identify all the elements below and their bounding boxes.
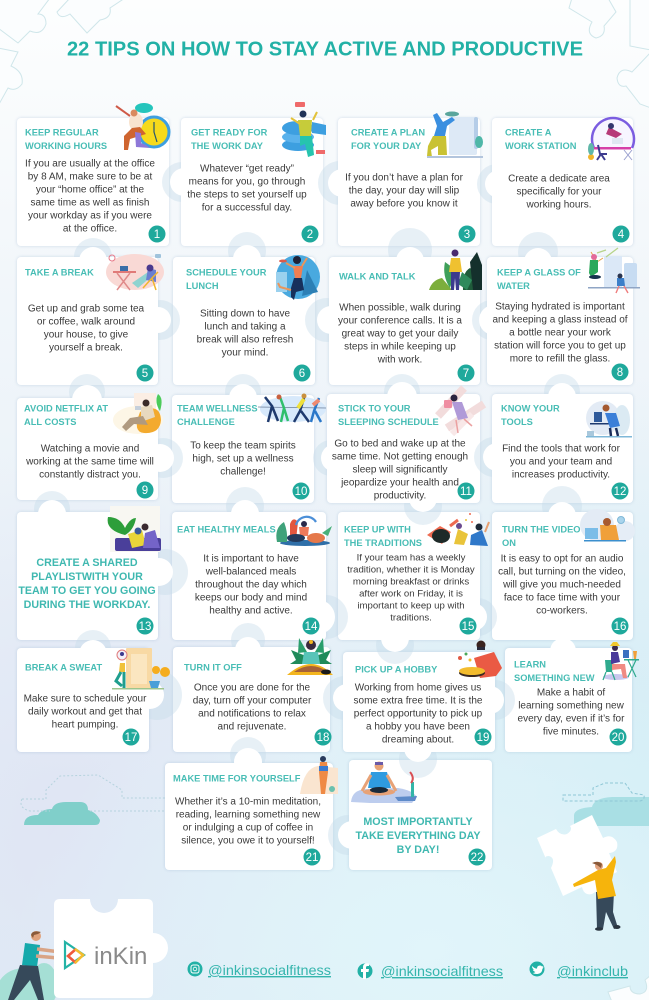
body 19: a hobby you have been [366, 722, 470, 732]
body 4: working hours. [525, 200, 592, 210]
body 15: If your team has a weekly [357, 552, 466, 564]
body 2: the steps to set yourself up [187, 190, 307, 200]
card 18 [173, 638, 333, 752]
badge 3: 3 [464, 229, 470, 241]
card 14 [172, 512, 332, 640]
card 6 [173, 255, 320, 385]
card 13 [17, 506, 161, 640]
heading 22: MOST IMPORTANTLY [363, 816, 473, 828]
badge 12: 12 [614, 486, 626, 498]
badge 6: 6 [299, 368, 305, 380]
heading 4: WORK STATION [505, 141, 577, 151]
body 19: some extra free time. It is the [354, 696, 483, 706]
badge 16: 16 [614, 621, 626, 633]
badge 8: 8 [617, 367, 623, 379]
card 5 [17, 254, 164, 385]
heading 13: CREATE A SHARED [36, 557, 138, 569]
card 9 [17, 393, 163, 500]
heading 22: TAKE EVERYTHING DAY [356, 830, 480, 842]
heading 1: WORKING HOURS [25, 141, 107, 151]
badge 1 [148, 226, 166, 242]
body 16: co-workers. [536, 606, 588, 616]
badge 1: 1 [154, 229, 160, 241]
badge 9: 9 [142, 485, 148, 497]
body 20: Make a habit of [537, 688, 605, 698]
body 11: jeopardize your health and [340, 478, 459, 488]
body 12: increases productivity. [512, 470, 610, 480]
body 15: tradition, whether it is Monday [347, 564, 475, 576]
heading 16: ON [502, 538, 516, 548]
badge 22 [468, 848, 486, 866]
body 5: Get up and grab some tea [28, 304, 145, 314]
body 19: Working from home gives us [355, 682, 481, 694]
card 22 [349, 760, 492, 870]
body 17: daily workout and get that [28, 706, 142, 718]
badge 15: 15 [462, 621, 474, 633]
heading 20: LEARN [514, 660, 546, 670]
background cloud: right [563, 783, 649, 826]
body 1: If you are usually at the office [25, 158, 155, 170]
badge 10: 10 [295, 486, 307, 498]
body 8: a bottle near your work [509, 328, 612, 338]
body 10: high, set up a wellness [192, 454, 294, 464]
icon: tug of war [258, 394, 326, 422]
badge 20: 20 [612, 732, 624, 744]
badge 10 [292, 482, 310, 500]
badge 5 [136, 364, 154, 382]
badge 7: 7 [463, 368, 469, 380]
body 8: and keeping a glass instead of [492, 314, 628, 326]
social: twitter [530, 962, 628, 979]
icon: woman relaxing [300, 756, 338, 794]
card 21 [165, 756, 338, 870]
body 5: yourself a break. [49, 342, 123, 354]
heading 15: THE TRADITIONS [344, 538, 422, 548]
badge 15 [460, 618, 476, 634]
body 1: by 8 AM, make sure to be at [28, 172, 152, 182]
body 3: the day, your day will slip [349, 186, 460, 196]
body 15: morning breakfast or drinks [353, 576, 469, 588]
heading 7: WALK AND TALK [339, 272, 416, 282]
heading 17: BREAK A SWEAT [25, 662, 102, 672]
body 21: or indulging a cup of coffee in [183, 822, 313, 834]
badge 11: 11 [460, 486, 472, 498]
badge 6 [294, 364, 310, 382]
heading 22: BY DAY! [397, 844, 439, 856]
heading 19: PICK UP A HOBBY [355, 664, 438, 674]
body 21: Whether it’s a 10-min meditation, [175, 796, 321, 808]
heading 9: AVOID NETFLIX AT [24, 404, 108, 414]
card 11 [327, 388, 484, 503]
badge 7 [458, 364, 474, 382]
icon: clock and runner [116, 103, 169, 150]
body 16: will give you much-needed [502, 580, 621, 590]
body 16: face to face time with your [504, 592, 621, 604]
icon: healthy food [276, 517, 332, 546]
icon: glasses and people [588, 248, 640, 293]
heading 13: TEAM TO GET YOU GOING [18, 585, 156, 597]
background cloud: left [21, 775, 165, 825]
heading 16: TURN THE VIDEO [502, 524, 581, 534]
logo: inKin: inKin [94, 943, 147, 970]
white puzzle card shapes with interlocking tabs [17, 118, 633, 870]
heading 10: TEAM WELLNESS [177, 404, 258, 414]
body 15: important to keep up with [357, 600, 465, 612]
heading 6: LUNCH [186, 281, 219, 291]
body 16: call, but turning on the video, [498, 566, 626, 578]
body 11: productivity. [374, 490, 426, 502]
body 14: healthy and active. [209, 606, 293, 616]
heading 8: KEEP A GLASS OF [497, 268, 581, 278]
card 3 [338, 112, 483, 246]
large puzzle piece with person [537, 815, 620, 931]
body 19: dreaming about. [382, 734, 454, 746]
puzzle piece: bottom right corner [608, 975, 649, 1000]
puzzle pieces: top right corner [569, 0, 649, 108]
card 20 [505, 642, 639, 752]
body 7: steps in while keeping up [344, 342, 456, 352]
card 12 [492, 394, 633, 503]
person pushing logo piece [0, 931, 60, 1000]
card 16 [492, 509, 635, 640]
badge 19 [474, 728, 492, 746]
card 1 [17, 103, 169, 246]
body 17: heart pumping. [52, 720, 118, 730]
icon: couple on sofa [108, 506, 161, 552]
body 18: Once you are done for the [194, 682, 311, 694]
body 1: at the office. [63, 224, 117, 234]
badge 5: 5 [142, 368, 148, 380]
heading 2: GET READY FOR [191, 128, 268, 138]
body 4: specifically for your [516, 186, 602, 198]
body 14: keeps our body and mind [195, 592, 307, 604]
body 9: working at the same time will [25, 456, 154, 468]
body 5: or coffee, walk around [37, 316, 135, 328]
icon: person at desk [586, 401, 632, 438]
body 21: silence, you owe it to yourself! [181, 836, 315, 846]
heading 3: CREATE A PLAN [351, 128, 425, 138]
heading 9: ALL COSTS [24, 417, 77, 427]
body 18: and rejuvenate. [218, 722, 286, 732]
body 17: Make sure to schedule your [24, 694, 147, 704]
body 20: every day, even if it’s for [518, 714, 625, 724]
icon: cooking [458, 640, 502, 678]
heading 11: SLEEPING SCHEDULE [338, 417, 439, 427]
body 2: Whatever “get ready” [200, 164, 294, 174]
badge 12 [612, 482, 628, 500]
body 1: your workday as if you were [28, 210, 152, 222]
icon: video call [580, 509, 635, 542]
badge 18: 18 [317, 732, 329, 744]
icon: meditation [287, 638, 333, 675]
badge 2: 2 [307, 229, 313, 241]
body 10: To keep the team spirits [190, 440, 296, 452]
heading 14: EAT HEALTHY MEALS [177, 524, 276, 534]
body 3: If you don’t have a plan for [345, 172, 464, 184]
badge 13: 13 [139, 621, 151, 633]
body 2: for a successful day. [202, 202, 292, 214]
heading 13: PLAYLISTWITH YOUR [31, 571, 143, 583]
body 11: Go to bed and wake up at the [334, 438, 466, 450]
card 10 [172, 394, 326, 503]
body 18: and notifications to relax [198, 708, 306, 720]
body 8: station will force you to get up [494, 340, 626, 352]
heading 20: SOMETHING NEW [514, 673, 595, 683]
badge 16 [612, 618, 628, 634]
icon: plan scroll and person [427, 112, 483, 158]
body 7: great way to get your daily [342, 328, 458, 340]
badge 4 [612, 226, 630, 242]
body 20: five minutes. [543, 726, 599, 738]
card 15 [338, 512, 489, 640]
body 14: throughout the day which [195, 580, 307, 590]
body 21: reading, learning something new [176, 810, 321, 820]
heading 12: TOOLS [501, 417, 533, 427]
badge 11 [458, 482, 474, 500]
icon: man meditating [351, 762, 417, 803]
badge 21 [304, 848, 320, 866]
heading 6: SCHEDULE YOUR [186, 268, 267, 278]
icon: student at table [603, 642, 639, 680]
body 11: sleep will significantly [352, 464, 448, 476]
icon: yoga pose [112, 648, 170, 690]
body 10: challenge! [220, 466, 266, 478]
body 6: Sitting down to have [200, 308, 290, 320]
badge 17 [122, 728, 140, 746]
heading 1: KEEP REGULAR [25, 128, 99, 138]
body 9: constantly distract you. [39, 470, 141, 480]
body 8: Staying hydrated is important [495, 302, 625, 312]
body 12: Find the tools that work for [502, 444, 621, 454]
heading 18: TURN IT OFF [184, 662, 242, 672]
heading 4: CREATE A [505, 128, 552, 138]
body 8: more to refill the glass. [510, 354, 610, 364]
puzzle pieces: top left corner [0, 0, 125, 106]
body 11: same time. Not getting enough [332, 452, 468, 462]
badge 22: 22 [471, 852, 483, 864]
body 3: away before you know it [350, 198, 458, 210]
heading 21: MAKE TIME FOR YOURSELF [173, 774, 301, 784]
badge 19: 19 [477, 732, 489, 744]
body 7: with work. [377, 354, 422, 366]
person carrying piece [573, 856, 620, 931]
body 19: perfect opportunity to pick up [354, 708, 483, 720]
badge 17: 17 [125, 732, 137, 744]
body 7: your conference calls. It is a [338, 316, 462, 326]
heading 8: WATER [497, 281, 530, 291]
body 15: traditions. [390, 612, 432, 624]
body 5: your house, to give [44, 330, 129, 340]
body 1: your “home office” at the [36, 184, 145, 196]
icon: clock and desk [588, 118, 634, 160]
icon: person walking in plants [429, 250, 482, 290]
heading 12: KNOW YOUR [501, 404, 560, 414]
body 6: lunch and taking a [204, 322, 286, 332]
icon: relaxing at table [106, 254, 164, 290]
icon: celebrating team [427, 513, 489, 546]
body 1: same time as well as finish [31, 198, 149, 208]
icon: sleeping woman [438, 388, 484, 434]
icon: data stack and person [282, 102, 326, 157]
card 17 [17, 648, 170, 752]
body 14: It is important to have [203, 554, 299, 564]
body 6: break will also refresh [197, 334, 293, 346]
badge 9 [136, 482, 154, 498]
card 7 [329, 250, 482, 385]
social: facebook: @inkinsocialfitness [381, 963, 503, 979]
icon: reading on bean bag [113, 393, 163, 434]
body 16: It is easy to opt for an audio [501, 554, 624, 564]
logo puzzle piece [54, 899, 168, 998]
card 19 [343, 640, 502, 752]
heading 10: CHALLENGE [177, 417, 235, 427]
body 2: means for you, go through [189, 176, 305, 188]
heading 15: KEEP UP WITH [344, 524, 411, 534]
card 4 [492, 118, 634, 246]
social: instagram: @inkinsocialfitness [208, 962, 331, 978]
heading 11: STICK TO YOUR [338, 404, 411, 414]
body 4: Create a dedicate area [508, 174, 610, 184]
title: 22 TIPS ON HOW TO STAY ACTIVE AND PRODUCTIVE [67, 38, 583, 60]
body 6: your mind. [222, 348, 268, 358]
card 2 [181, 102, 326, 246]
badge 13 [136, 618, 154, 634]
social: twitter: @inkinclub [557, 963, 628, 979]
badge 2 [302, 226, 318, 242]
body 20: learning something new [518, 700, 625, 712]
badge 14: 14 [305, 621, 318, 633]
heading 3: FOR YOUR DAY [351, 141, 422, 151]
icon: lunch dance [276, 255, 320, 300]
body 15: after work on Friday, it is [359, 588, 463, 600]
body 7: When possible, walk during [339, 302, 461, 314]
body 9: Watching a movie and [41, 444, 139, 454]
badge 8 [612, 364, 628, 380]
body 12: you and your team and [510, 456, 612, 468]
heading 5: TAKE A BREAK [25, 268, 94, 278]
card 8 [487, 248, 640, 385]
badge 4: 4 [618, 229, 625, 241]
heading 2: THE WORK DAY [191, 141, 264, 151]
badge 14 [302, 618, 320, 634]
body 18: day, turn off your computer [193, 696, 312, 706]
badge 3 [458, 226, 476, 242]
body 14: well-balanced meals [205, 566, 296, 578]
badge 21: 21 [306, 852, 318, 864]
heading 13: DURING THE WORKDAY. [24, 599, 150, 611]
badge 18 [314, 728, 332, 746]
